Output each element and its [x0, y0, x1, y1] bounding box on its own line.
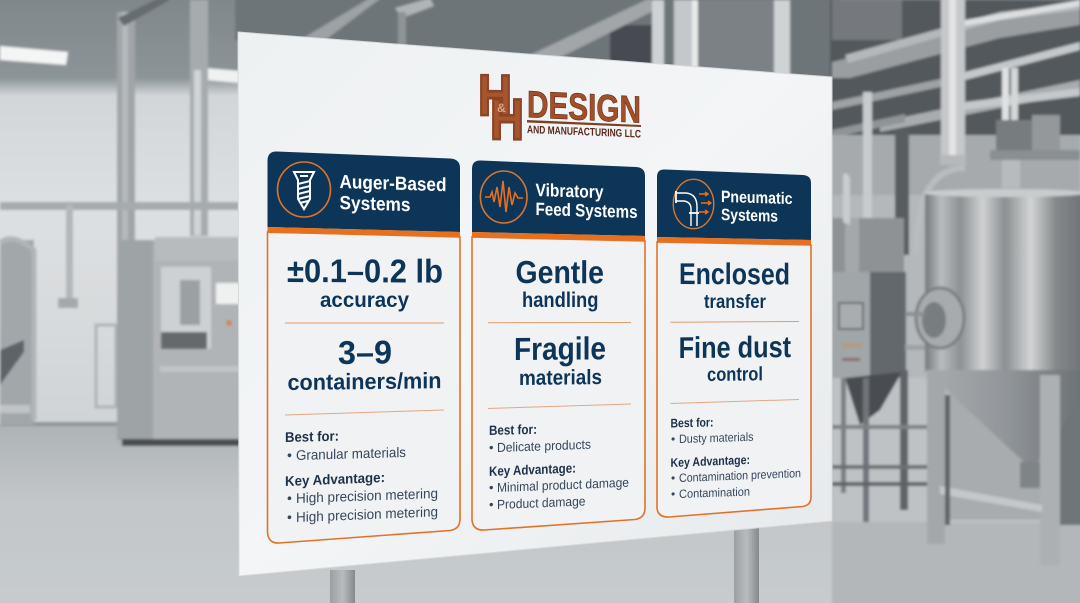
header band [657, 169, 811, 240]
details: Key Advantage: [489, 461, 576, 479]
logo mark: overlapping H letters: H [478, 63, 512, 128]
details [285, 428, 438, 525]
logo mark: overlapping H letters [478, 63, 524, 152]
sign posts [330, 525, 759, 603]
header title [721, 188, 792, 226]
metric: gentle handling: handling [522, 289, 598, 312]
details [489, 422, 629, 512]
header title: Pneumatic [721, 188, 792, 208]
details: • [671, 487, 675, 501]
metric: fine dust control: Fine dust [679, 331, 791, 365]
panel: vibratory feed systems [472, 160, 645, 530]
header title: Systems [340, 193, 410, 216]
logo tagline: AND MANUFACTURING LLC [527, 124, 641, 141]
details: Key Advantage: [285, 469, 385, 489]
foreground tank [916, 168, 965, 255]
details: High precision metering [296, 485, 438, 506]
details: Dusty materials [679, 430, 754, 446]
details: Contamination [679, 485, 750, 501]
metric: enclosed transfer: transfer [704, 291, 766, 313]
metric: gentle handling: Gentle [516, 254, 604, 290]
logo mark: overlapping H letters: H [490, 87, 524, 152]
upper centre ceiling [235, 0, 840, 85]
metric: containers per minute [288, 333, 442, 395]
metric: accuracy: ±0.1–0.2 lb [287, 252, 443, 290]
panel body [268, 232, 460, 543]
details: Contamination prevention [679, 466, 801, 485]
panel body [657, 242, 811, 517]
header title [536, 180, 638, 222]
icon: pipe with arrows [673, 179, 714, 229]
details: Granular materials [296, 444, 406, 463]
details: • [287, 447, 292, 463]
metric: enclosed transfer: Enclosed [679, 258, 790, 291]
logo: H&H Design and Manufacturing LLC [478, 63, 641, 152]
metric: fragile materials: materials [519, 366, 602, 390]
details: • [489, 440, 494, 455]
central machine [117, 240, 242, 445]
right side background [830, 0, 1080, 520]
panel: pneumatic systems [657, 169, 811, 517]
details: Best for: [285, 428, 339, 445]
metric: containers per minute: containers/min [288, 368, 442, 395]
metric: fragile materials: Fragile [514, 330, 606, 367]
header title: Systems [721, 206, 778, 226]
header title [340, 172, 446, 216]
metric: fine dust control: control [707, 363, 763, 386]
icon: screw [278, 162, 330, 217]
details: Best for: [670, 415, 714, 430]
details: Minimal product damage [497, 475, 629, 495]
back tank and cabinet [832, 218, 904, 274]
details: Key Advantage: [670, 453, 750, 470]
logo wordmark: DESIGN [527, 83, 641, 131]
details: High precision metering [296, 503, 438, 525]
details: • [489, 497, 494, 512]
metric: enclosed transfer [679, 258, 790, 313]
metric: accuracy [287, 252, 443, 312]
metric: containers per minute: 3–9 [338, 333, 392, 371]
sign board [238, 32, 832, 576]
metric: fragile materials [514, 330, 606, 390]
details: Delicate products [497, 437, 591, 455]
details: • [671, 471, 675, 485]
details: • [287, 490, 292, 506]
header band [268, 151, 460, 232]
details: • [671, 432, 675, 446]
details: • [489, 480, 494, 495]
metric: accuracy: accuracy [320, 288, 409, 312]
details: • [287, 509, 292, 525]
details [670, 415, 801, 501]
metric: fine dust control [679, 331, 791, 386]
logo mark: overlapping H letters: & [497, 101, 506, 115]
panel: auger-based systems [268, 151, 460, 543]
header title: Auger-Based [340, 172, 446, 196]
header title: Vibratory [536, 180, 604, 202]
header band [472, 160, 645, 236]
details: Best for: [489, 422, 537, 438]
left machine silhouette [0, 240, 34, 425]
panel body [472, 237, 645, 530]
icon: vibration wave [480, 171, 527, 223]
metric: gentle handling [516, 254, 604, 312]
details: Product damage [497, 493, 586, 512]
header title: Feed Systems [536, 199, 638, 222]
